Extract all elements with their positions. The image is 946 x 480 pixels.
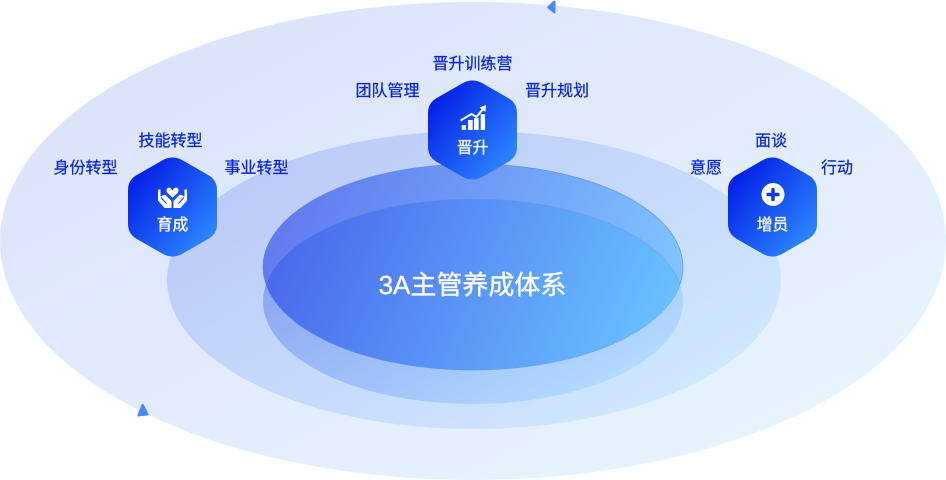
labels: 增员: 面谈 (755, 132, 787, 150)
labels: 晋升 (355, 55, 589, 100)
hexagon badge: 增员 (728, 158, 817, 256)
icon: rising chart (460, 105, 486, 130)
labels: 育成: 事业转型 (224, 159, 289, 177)
arrow: top orbit marker (547, 1, 556, 13)
badge label: 增员: 增员 (757, 216, 788, 234)
overlap of inner ellipses (266, 199, 680, 370)
hexagon badge: 育成 (128, 158, 217, 256)
labels: 育成 (53, 132, 289, 177)
lower inner ellipse (263, 199, 683, 404)
group: 增员 (690, 132, 853, 256)
group: 晋升 (355, 55, 589, 180)
labels: 晋升: 团队管理 (355, 82, 420, 100)
title: 3A主管养成体系 (379, 270, 566, 300)
icon: plus circle (762, 183, 784, 206)
labels: 增员: 行动 (821, 159, 853, 177)
icon: hands holding heart (158, 188, 187, 208)
badge label: 育成: 育成 (157, 216, 188, 234)
labels: 育成: 技能转型 (138, 132, 203, 150)
middle ellipse (167, 131, 781, 429)
hexagon badge: 晋升 (428, 80, 517, 180)
group: 育成 (53, 132, 289, 256)
badge label: 晋升: 晋升 (457, 139, 488, 157)
labels: 晋升: 晋升规划 (525, 82, 589, 100)
labels: 增员: 意愿 (690, 158, 722, 177)
arrow: bottom orbit marker (137, 404, 149, 416)
labels: 增员 (690, 132, 853, 177)
upper inner ellipse (263, 164, 683, 370)
labels: 晋升: 晋升训练营 (432, 55, 513, 73)
labels: 育成: 身份转型 (53, 159, 118, 177)
